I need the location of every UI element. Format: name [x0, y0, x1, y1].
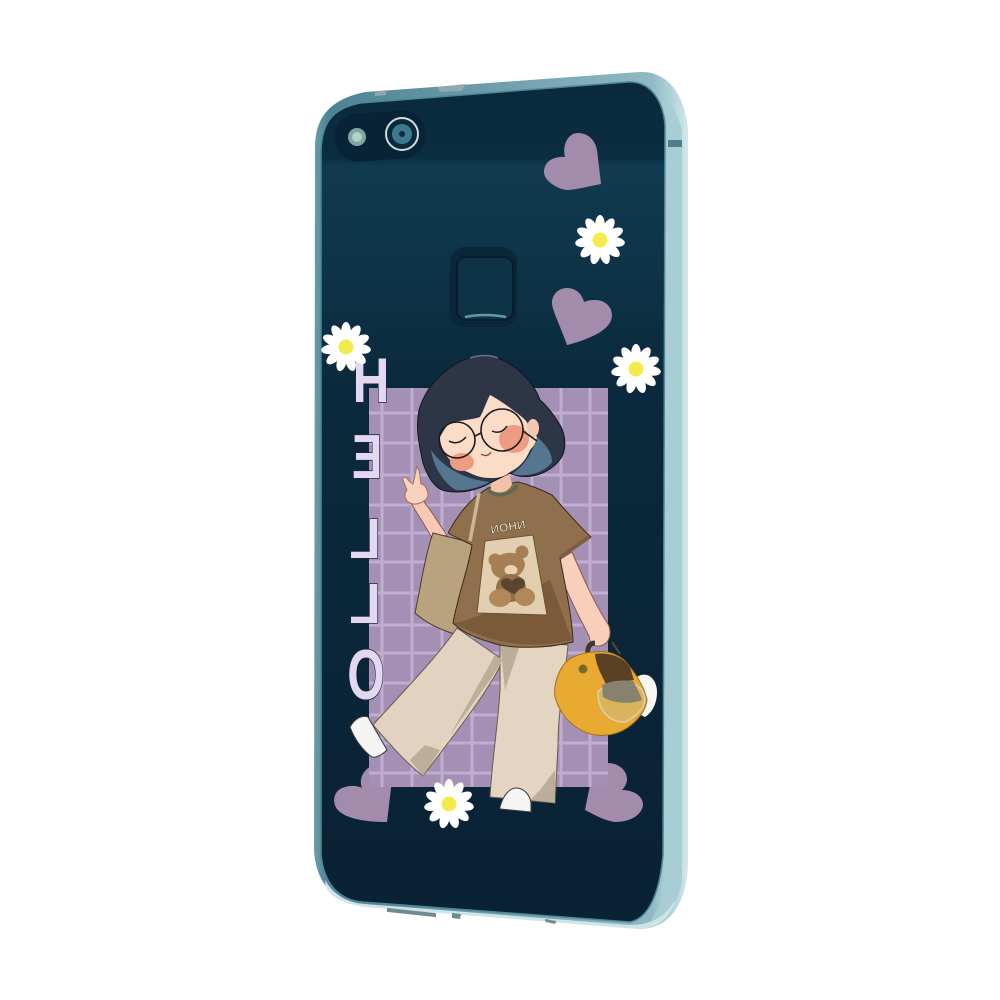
left trouser leg: [373, 628, 503, 776]
heart bottom left: [334, 765, 392, 822]
bag body: [555, 652, 647, 735]
sleeve cuff: [560, 536, 591, 559]
phone case: [314, 72, 688, 929]
right shoe: [500, 788, 531, 812]
flash centre: [352, 132, 362, 142]
bear poster: [477, 535, 547, 615]
cheek left: [450, 453, 474, 471]
eye left: [449, 437, 466, 443]
lens pupil: [399, 131, 405, 137]
tote bag: [415, 533, 473, 635]
ear: [527, 419, 539, 437]
phone back panel: [321, 82, 665, 922]
checked purple panel: [369, 388, 608, 787]
fingerprint sensor: [450, 247, 517, 327]
blue hair tips right: [512, 437, 552, 475]
bag button: [578, 664, 588, 674]
heart bottom right: [585, 763, 643, 822]
bear muzzle: [504, 565, 518, 575]
bag opening: [595, 654, 634, 684]
bottom port details: [388, 909, 556, 923]
cheek right: [499, 425, 529, 453]
teddy bear: [488, 546, 535, 607]
daisy bottom: [424, 779, 474, 829]
yellow handbag: [555, 642, 657, 735]
daisy right of panel: [611, 344, 661, 394]
mouth: [481, 452, 491, 456]
hair back: [418, 355, 565, 492]
girl illustration: [350, 355, 610, 812]
hair highlight: [470, 356, 498, 358]
letter E: E: [352, 423, 382, 492]
grid lines: [369, 388, 608, 787]
camera pod: [333, 109, 427, 163]
right trouser leg: [490, 640, 568, 803]
lens glass: [392, 124, 412, 144]
bear head: [489, 550, 527, 582]
daisy left of HELLO: [321, 322, 371, 372]
flash: [348, 128, 366, 146]
outer clear case: [314, 72, 688, 929]
heart top: [544, 133, 601, 190]
letter L second: L: [349, 572, 381, 636]
bag handle: [588, 643, 595, 655]
sensor pad: [457, 257, 513, 320]
bottom edge highlight: [325, 880, 675, 929]
glass sphere: [598, 682, 645, 722]
lens: [386, 118, 418, 150]
hem shading: [453, 580, 572, 645]
bag right handle: [612, 642, 620, 654]
sensor highlight: [465, 315, 506, 317]
panel fill: [369, 388, 608, 787]
side rim highlight: [650, 100, 682, 922]
letter O: O: [347, 636, 385, 714]
face: [440, 395, 537, 478]
neck: [490, 468, 512, 492]
bear body: [496, 574, 526, 602]
grey dome window: [602, 680, 642, 703]
glasses: [439, 409, 537, 458]
pod background: [333, 109, 427, 163]
bear feet: [489, 589, 511, 607]
bag strap: [470, 493, 479, 541]
eye right: [492, 426, 507, 432]
shirt text: ИОНИ: [489, 517, 527, 537]
letter H: H: [353, 346, 389, 416]
letter L: L: [349, 507, 381, 571]
daisy near top right: [575, 215, 625, 265]
trouser shading: [410, 640, 555, 803]
blue hair tips left: [431, 450, 490, 490]
t-shirt: [448, 482, 591, 647]
white ribbon: [635, 675, 657, 717]
bear ears: [488, 554, 502, 566]
heart middle: [552, 288, 612, 345]
left shoe: [350, 716, 387, 757]
necklace: [488, 485, 517, 495]
top port details: [375, 84, 466, 96]
right arm: [556, 552, 610, 646]
bear heart: [501, 578, 525, 594]
raised arm and peace hand: [403, 466, 447, 542]
power button: [668, 140, 682, 147]
sensor recess: [450, 247, 517, 327]
HELLO vertical mirrored lettering: [347, 346, 389, 714]
